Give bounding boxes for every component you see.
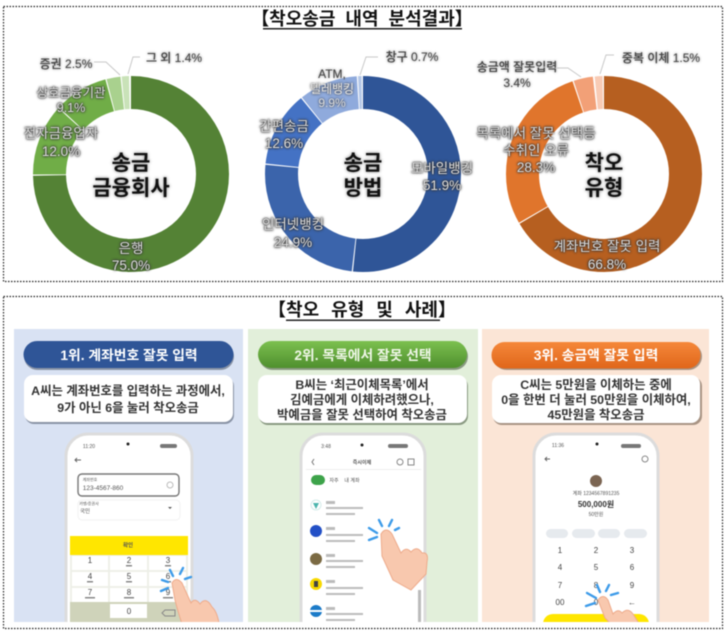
rank 2 description: 김예금에게 이체하려했으나,: [290, 392, 434, 407]
icon: tapping hand: [586, 585, 640, 625]
rank 2 description: B씨는 ‘최근이체목록’에서: [295, 378, 429, 392]
phone: account entry keypad: 카뱅/증권사: [79, 500, 99, 506]
chart: financial company donut: 12.0%: [42, 144, 80, 159]
chart: financial company donut: 그 외 1.4%: [146, 51, 202, 65]
chart: error type donut: 착오: [585, 152, 623, 175]
rank 1 description: [24, 375, 234, 424]
panel: rank 2 list selection: [248, 329, 478, 631]
chart: financial company donut: 증권 2.5%: [40, 57, 93, 71]
chart: remittance method donut: [259, 50, 473, 256]
chart: financial company donut: 금융회사: [92, 177, 170, 200]
phone: account entry keypad: 3: [166, 556, 171, 565]
chart: remittance method donut: 인터넷뱅킹: [262, 217, 324, 232]
chart: remittance method donut: 창구 0.7%: [386, 50, 439, 64]
chart: error type donut: 목록에서 잘못 선택등: [476, 126, 596, 141]
phone: recent transfer list: 3:48: [321, 444, 331, 450]
phone: recent transfer list: [301, 434, 427, 631]
phone: amount keypad: 6: [630, 563, 635, 572]
rank 1 description: A씨는 계좌번호를 입력하는 과정에서,: [31, 383, 225, 398]
chart: financial company donut: 송금: [112, 152, 150, 175]
chart: remittance method donut: 간편송금: [259, 119, 309, 134]
panel: rank 1 account number: [14, 329, 243, 631]
rank 1 pill: 1위. 계좌번호 잘못 입력: [60, 348, 198, 363]
phone: amount keypad: 8: [594, 581, 599, 590]
icon: tapping hand: [369, 520, 427, 590]
phone: recent transfer list: 즉시이체: [353, 459, 372, 466]
phone: amount keypad: 1: [558, 546, 563, 555]
rank 2 pill: [258, 341, 468, 370]
chart: remittance method donut: 송금: [344, 152, 382, 175]
chart: error type donut: 계좌번호 잘못 입력: [554, 239, 660, 254]
phone: amount keypad: 50만원: [589, 511, 604, 518]
phone: amount keypad: 계좌 1234567891235: [573, 490, 620, 497]
phone: account entry keypad: 국민: [80, 507, 90, 515]
phone: amount keypad: 4: [558, 563, 563, 572]
panel: rank 3 amount: [482, 329, 709, 631]
rank 1 pill: [24, 341, 234, 370]
phone: amount keypad: 5: [594, 563, 599, 572]
heading: types and cases: 【착오 유형 및 사례】: [268, 300, 456, 320]
phone: account entry keypad: 6: [166, 572, 171, 581]
rank 2 pill: 2위. 목록에서 잘못 선택: [294, 348, 432, 363]
heading: analysis results: 【착오송금 내역 분석결과】: [251, 9, 473, 29]
phone: account entry keypad: 5: [127, 572, 132, 581]
phone: account entry keypad: [66, 434, 220, 631]
rank 2 description: 박예금을 잘못 선택하여 착오송금: [277, 407, 447, 422]
chart: financial company donut: 9.1%: [57, 101, 85, 115]
phone: amount keypad: 9: [630, 581, 635, 590]
chart: error type donut: 3.4%: [503, 76, 531, 90]
phone: account entry keypad: 8: [127, 588, 132, 597]
phone: amount keypad: 11:36: [552, 443, 564, 449]
phone: amount keypad: ←: [628, 598, 636, 607]
rank 3 pill: 3위. 송금액 잘못 입력: [534, 348, 658, 363]
chart: remittance method donut: 9.9%: [318, 96, 346, 110]
rank 3 description: C씨는 5만원을 이체하는 중에: [520, 378, 672, 392]
chart: error type donut: [476, 51, 700, 272]
chart: error type donut: 28.3%: [517, 160, 555, 175]
chart: error type donut: 중복 이체 1.5%: [622, 51, 700, 65]
phone: amount keypad: 3: [630, 546, 635, 555]
chart: remittance method donut: 24.9%: [274, 235, 312, 250]
rank 3 description: 0을 한번 더 눌러 50만원을 이체하여,: [501, 392, 691, 407]
chart: remittance method donut: 51.9%: [423, 178, 461, 193]
phone: account entry keypad: 123-4567-860: [83, 485, 124, 492]
rank 2 description: [258, 375, 468, 425]
phone: amount keypad: 0: [594, 598, 599, 607]
icon: tapping hand: [161, 568, 220, 630]
phone: amount keypad: 7: [558, 581, 563, 590]
phone: amount keypad: 2: [594, 546, 599, 555]
rank 3 pill: [492, 342, 702, 370]
chart: remittance method donut: 12.6%: [265, 136, 303, 151]
phone: account entry keypad: 계좌번호: [83, 476, 98, 482]
chart: error type donut: 66.8%: [588, 257, 626, 272]
rank 3 description: 45만원을 착오송금: [547, 407, 645, 422]
phone: amount keypad: [534, 434, 658, 631]
phone: account entry keypad: 0: [127, 607, 132, 616]
panel: error types and cases: [4, 296, 722, 631]
chart: remittance method donut: 텔레뱅킹: [310, 82, 354, 96]
rank 3 description: [492, 375, 702, 425]
phone: recent transfer list: 자주: [329, 477, 339, 484]
phone: account entry keypad: 4: [88, 572, 93, 581]
phone: amount keypad: 500,000원: [578, 499, 614, 509]
chart: financial company donut: 은행: [119, 241, 143, 256]
phone: account entry keypad: 확인: [123, 541, 133, 549]
chart: financial company donut: 전자금융업자: [24, 126, 99, 141]
phone: account entry keypad: 2: [127, 556, 132, 565]
chart: error type donut: 수취인 오류: [503, 143, 569, 158]
phone: amount keypad: 00: [556, 598, 565, 607]
chart: remittance method donut: 모바일뱅킹: [411, 161, 473, 176]
phone: account entry keypad: 11:20: [83, 444, 95, 450]
phone: account entry keypad: 7: [88, 588, 93, 597]
chart: financial company donut: [24, 51, 212, 273]
rank 1 description: 9가 아닌 6을 눌러 착오송금: [57, 400, 199, 415]
chart: error type donut: 유형: [585, 177, 623, 200]
phone: recent transfer list: 내 계좌: [344, 477, 360, 484]
chart: error type donut: 송금액 잘못입력: [477, 60, 557, 74]
chart: financial company donut: 상호금융기관: [36, 86, 106, 100]
panel: remittance analysis: [4, 6, 722, 282]
phone: account entry keypad: 1: [88, 556, 93, 565]
chart: financial company donut: 75.0%: [112, 258, 150, 273]
chart: remittance method donut: 방법: [344, 177, 382, 200]
phone: account entry keypad: 9: [166, 588, 171, 597]
chart: remittance method donut: ATM,: [318, 67, 346, 81]
